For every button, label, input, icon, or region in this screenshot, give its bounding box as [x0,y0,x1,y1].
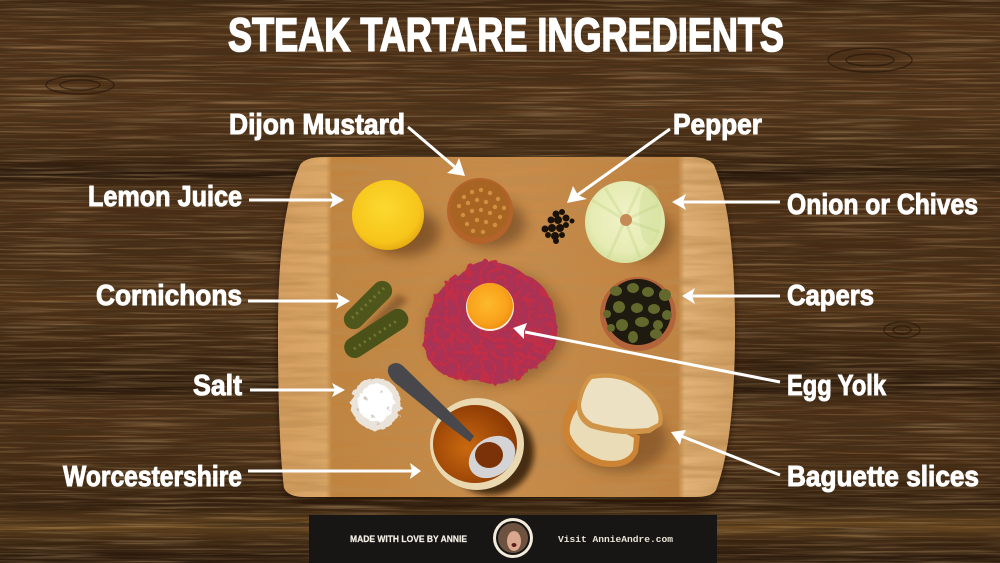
icon: cornichons [340,277,412,362]
label: Pepper with arrow [567,109,762,203]
label: Lemon Juice with arrow: Lemon Juice [88,181,242,213]
icon: lemon [352,180,440,256]
label: Capers with arrow: Capers [787,280,874,312]
cutting board [278,157,735,500]
label: Baguette slices with arrow: Baguette slices [787,461,979,493]
icon: spoon [388,363,523,487]
icon: capers bowl [600,277,676,351]
icon: Annie portrait [493,518,533,558]
label: Salt with arrow: Salt [193,370,242,402]
label: Onion or Chives with arrow [672,189,978,221]
icon: onion [585,181,674,263]
icon: tartare meat [424,260,567,386]
footer bar [309,515,717,563]
label: Worcestershire with arrow [63,461,421,493]
footer text: made with love: MADE WITH LOVE BY ANNIE [350,534,467,545]
icon: worcestershire dish [430,398,534,495]
icon: baguette slices [562,373,668,472]
icon: egg yolk [466,283,514,331]
label: Worcestershire with arrow: Worcestershire [63,461,242,493]
label: Capers with arrow [682,280,874,312]
label: Pepper with arrow: Pepper [673,109,762,141]
label: Dijon Mustard with arrow: Dijon Mustard [229,109,405,141]
label: Lemon Juice with arrow [88,181,344,213]
label: Egg Yolk with arrow [513,323,887,402]
title: STEAK TARTARE INGREDIENTS [228,8,784,61]
label: Salt with arrow [193,370,345,402]
label: Egg Yolk with arrow: Egg Yolk [787,370,887,402]
label: Dijon Mustard with arrow [229,109,465,176]
footer text: visit site: Visit AnnieAndre.com [558,535,674,545]
label: Cornichons with arrow [96,280,350,312]
label: Baguette slices with arrow [671,430,979,493]
icon: mustard bowl [447,178,526,248]
icon: pepper [542,209,574,244]
label: Cornichons with arrow: Cornichons [96,280,242,312]
icon: salt [351,378,401,430]
